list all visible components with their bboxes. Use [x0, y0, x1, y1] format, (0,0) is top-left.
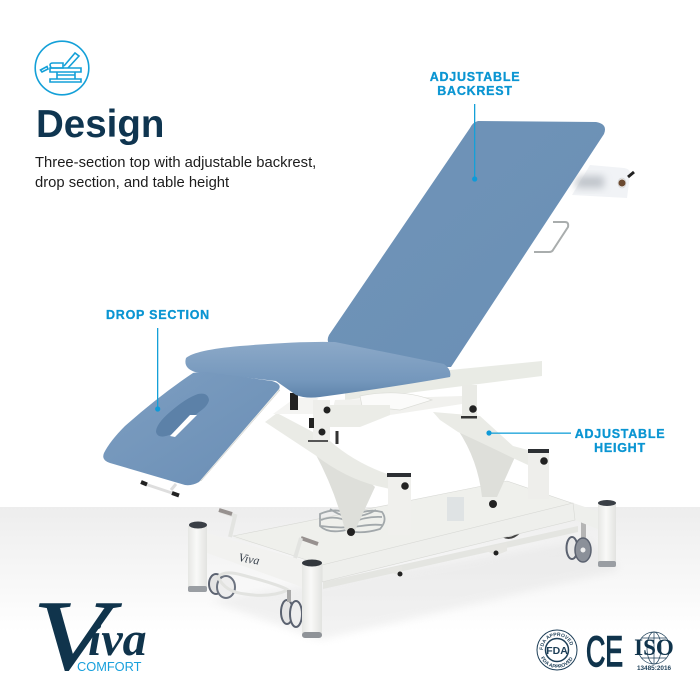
description: drop section, and table height: [35, 175, 229, 191]
FDA badge: [536, 630, 578, 670]
right scissor arm: [433, 412, 528, 465]
front left leg: [188, 522, 207, 592]
description: [35, 155, 316, 191]
left lift post: [387, 473, 411, 535]
FDA badge: FDA APPROVED: [540, 632, 573, 650]
CE mark: CE: [586, 628, 623, 676]
centre leg: [302, 560, 322, 638]
ISO globe: [638, 632, 670, 664]
label: adjustable height: [574, 427, 665, 455]
short end beam: [188, 528, 302, 587]
left scissor web: [315, 443, 375, 537]
FDA badge: FDA: [546, 645, 568, 657]
right lift post: [528, 449, 549, 499]
right scissor web: [458, 418, 515, 497]
handles: [219, 510, 318, 558]
ISO mark: ISO: [634, 635, 674, 660]
paper roll: [572, 165, 634, 198]
drop section cushion: [103, 372, 280, 485]
header icon: table in circle: [35, 41, 89, 95]
right end beam and rear leg: [573, 500, 616, 567]
drop section foot bar: [141, 482, 179, 496]
floor shadow: [210, 540, 620, 640]
backrest callout line: [472, 104, 477, 182]
label: adjustable height: ADJUSTABLE: [575, 427, 665, 441]
FDA badge: FDA APPROVED: [541, 656, 572, 668]
label: adjustable backrest: BACKREST: [437, 84, 513, 98]
cables: [320, 509, 385, 532]
logo: Viva Comfort: [33, 580, 147, 691]
right caster: [566, 522, 591, 562]
logo: Viva Comfort: V: [33, 580, 109, 691]
hidden caster: [498, 532, 520, 538]
base plate: [233, 483, 573, 563]
right scissor knob: [489, 500, 497, 508]
height callout line: [486, 430, 571, 436]
backrest cushion: [328, 121, 605, 367]
upper frame: [273, 361, 542, 444]
seat cushion: [185, 342, 450, 398]
logo: Viva Comfort: COMFORT: [77, 659, 141, 674]
face hole: [156, 394, 209, 437]
long front beam: [322, 503, 575, 582]
motor column: [447, 497, 464, 521]
ISO standard number: 13485:2016: [637, 665, 671, 672]
logo: Viva Comfort: iva: [88, 613, 147, 666]
floor background: [0, 507, 700, 700]
title: Design: [36, 103, 164, 146]
left scissor knob: [347, 528, 355, 536]
label: adjustable backrest: ADJUSTABLE: [430, 70, 520, 84]
label: adjustable backrest: [430, 70, 520, 98]
logo on frame: Viva: [237, 550, 261, 568]
rear rail line: [233, 481, 598, 565]
backrest handle: [534, 222, 568, 252]
rear left casters: [209, 573, 288, 598]
label: adjustable height: HEIGHT: [594, 441, 646, 455]
drop section callout line: [155, 328, 160, 412]
front caster: [281, 590, 302, 627]
description: Three-section top with adjustable backrest,: [35, 155, 316, 171]
lower rail: [323, 526, 578, 589]
left scissor arm: [265, 413, 390, 489]
drop section support: [198, 390, 280, 481]
label: drop section: DROP SECTION: [106, 308, 210, 322]
